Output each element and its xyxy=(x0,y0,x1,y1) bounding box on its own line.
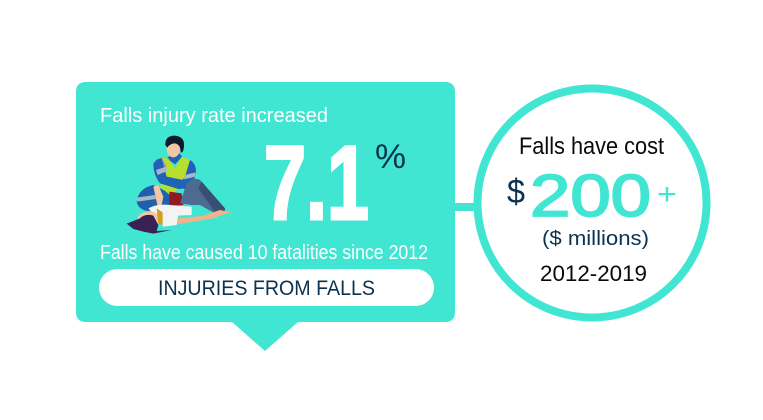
panel: injuries from falls xyxy=(76,82,455,351)
safety vest xyxy=(160,157,190,197)
dollar sign: $ xyxy=(507,173,525,211)
year range: 2012-2019 xyxy=(540,261,647,286)
icon: responder aiding injured person xyxy=(127,136,232,234)
vest stripes xyxy=(155,157,195,179)
raised arm xyxy=(153,185,163,205)
injured hair xyxy=(127,215,172,234)
text: fatalities: Falls have caused 10 fatalities since 2012 xyxy=(100,242,428,264)
bandage xyxy=(157,208,163,225)
plus sign: + xyxy=(657,178,677,211)
red kit xyxy=(169,192,183,207)
heading: falls have cost: Falls have cost xyxy=(519,133,664,160)
responder neck and collar xyxy=(167,153,182,164)
label pill xyxy=(99,269,434,306)
left arm xyxy=(153,158,187,189)
panel: cost circle xyxy=(478,88,706,318)
foot xyxy=(205,210,232,216)
label text: INJURIES FROM FALLS xyxy=(158,277,375,300)
percent sign: % xyxy=(375,138,406,176)
big number 7.1: 7.1 xyxy=(264,125,369,242)
responder legs xyxy=(137,185,170,211)
circle outline xyxy=(478,88,706,318)
connector line xyxy=(450,203,478,211)
injured head xyxy=(138,212,161,226)
lying arm xyxy=(177,214,217,224)
speech bubble background xyxy=(76,82,455,351)
unit label: ($ millions) xyxy=(542,228,649,250)
right arm xyxy=(180,160,196,190)
face xyxy=(167,141,180,157)
grey legs of injured person xyxy=(180,179,225,214)
arm stripe xyxy=(156,167,167,175)
hair xyxy=(165,136,184,152)
injured shirt xyxy=(148,205,192,227)
big number 200: 200 xyxy=(530,163,651,229)
heading: injury rate: Falls injury rate increased xyxy=(100,105,328,127)
